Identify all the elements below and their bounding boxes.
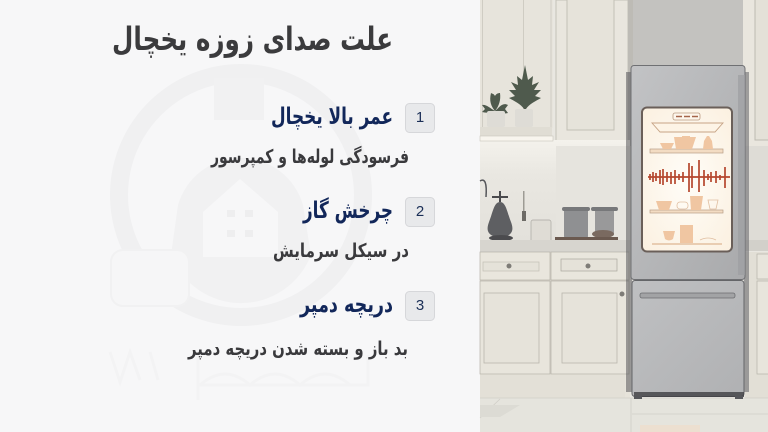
- shelf: [480, 127, 553, 141]
- description 3: بد باز و بسته شدن دریچه دمپر: [187, 338, 408, 360]
- item 2: [273, 197, 434, 262]
- kitchen illustration: [480, 0, 768, 432]
- kettle and pots: [480, 180, 618, 244]
- badge 1: [406, 104, 434, 132]
- left panel background: [0, 0, 480, 432]
- heading 1: عمر بالا یخچال: [271, 104, 393, 130]
- food silhouettes: [656, 136, 713, 243]
- plants: [482, 65, 541, 127]
- badge 2: 2: [416, 203, 424, 220]
- upper cabinets: [480, 0, 768, 146]
- sound wave: [648, 160, 730, 192]
- under-cabinet wall: [480, 140, 630, 240]
- base cabinets: [480, 252, 768, 398]
- heading 2: چرخش گاز: [302, 197, 393, 224]
- badge 3: 3: [416, 297, 424, 314]
- item 1: [210, 104, 434, 168]
- badge 2: [406, 198, 434, 226]
- description 2: در سیکل سرمایش: [273, 240, 409, 262]
- watermark logo: [110, 64, 372, 400]
- refrigerator: [626, 66, 749, 399]
- item 3: [187, 292, 434, 360]
- title: علت صدای زوزه یخچال: [112, 20, 393, 58]
- badge 1: 1: [416, 109, 424, 126]
- description 1: فرسودگی لوله‌ها و کمپرسور: [210, 145, 409, 168]
- counter: [480, 240, 630, 252]
- floor: [480, 398, 768, 432]
- fridge window: [642, 108, 732, 252]
- heading 3: دریچه دمپر: [299, 292, 393, 318]
- badge 3: [406, 292, 434, 320]
